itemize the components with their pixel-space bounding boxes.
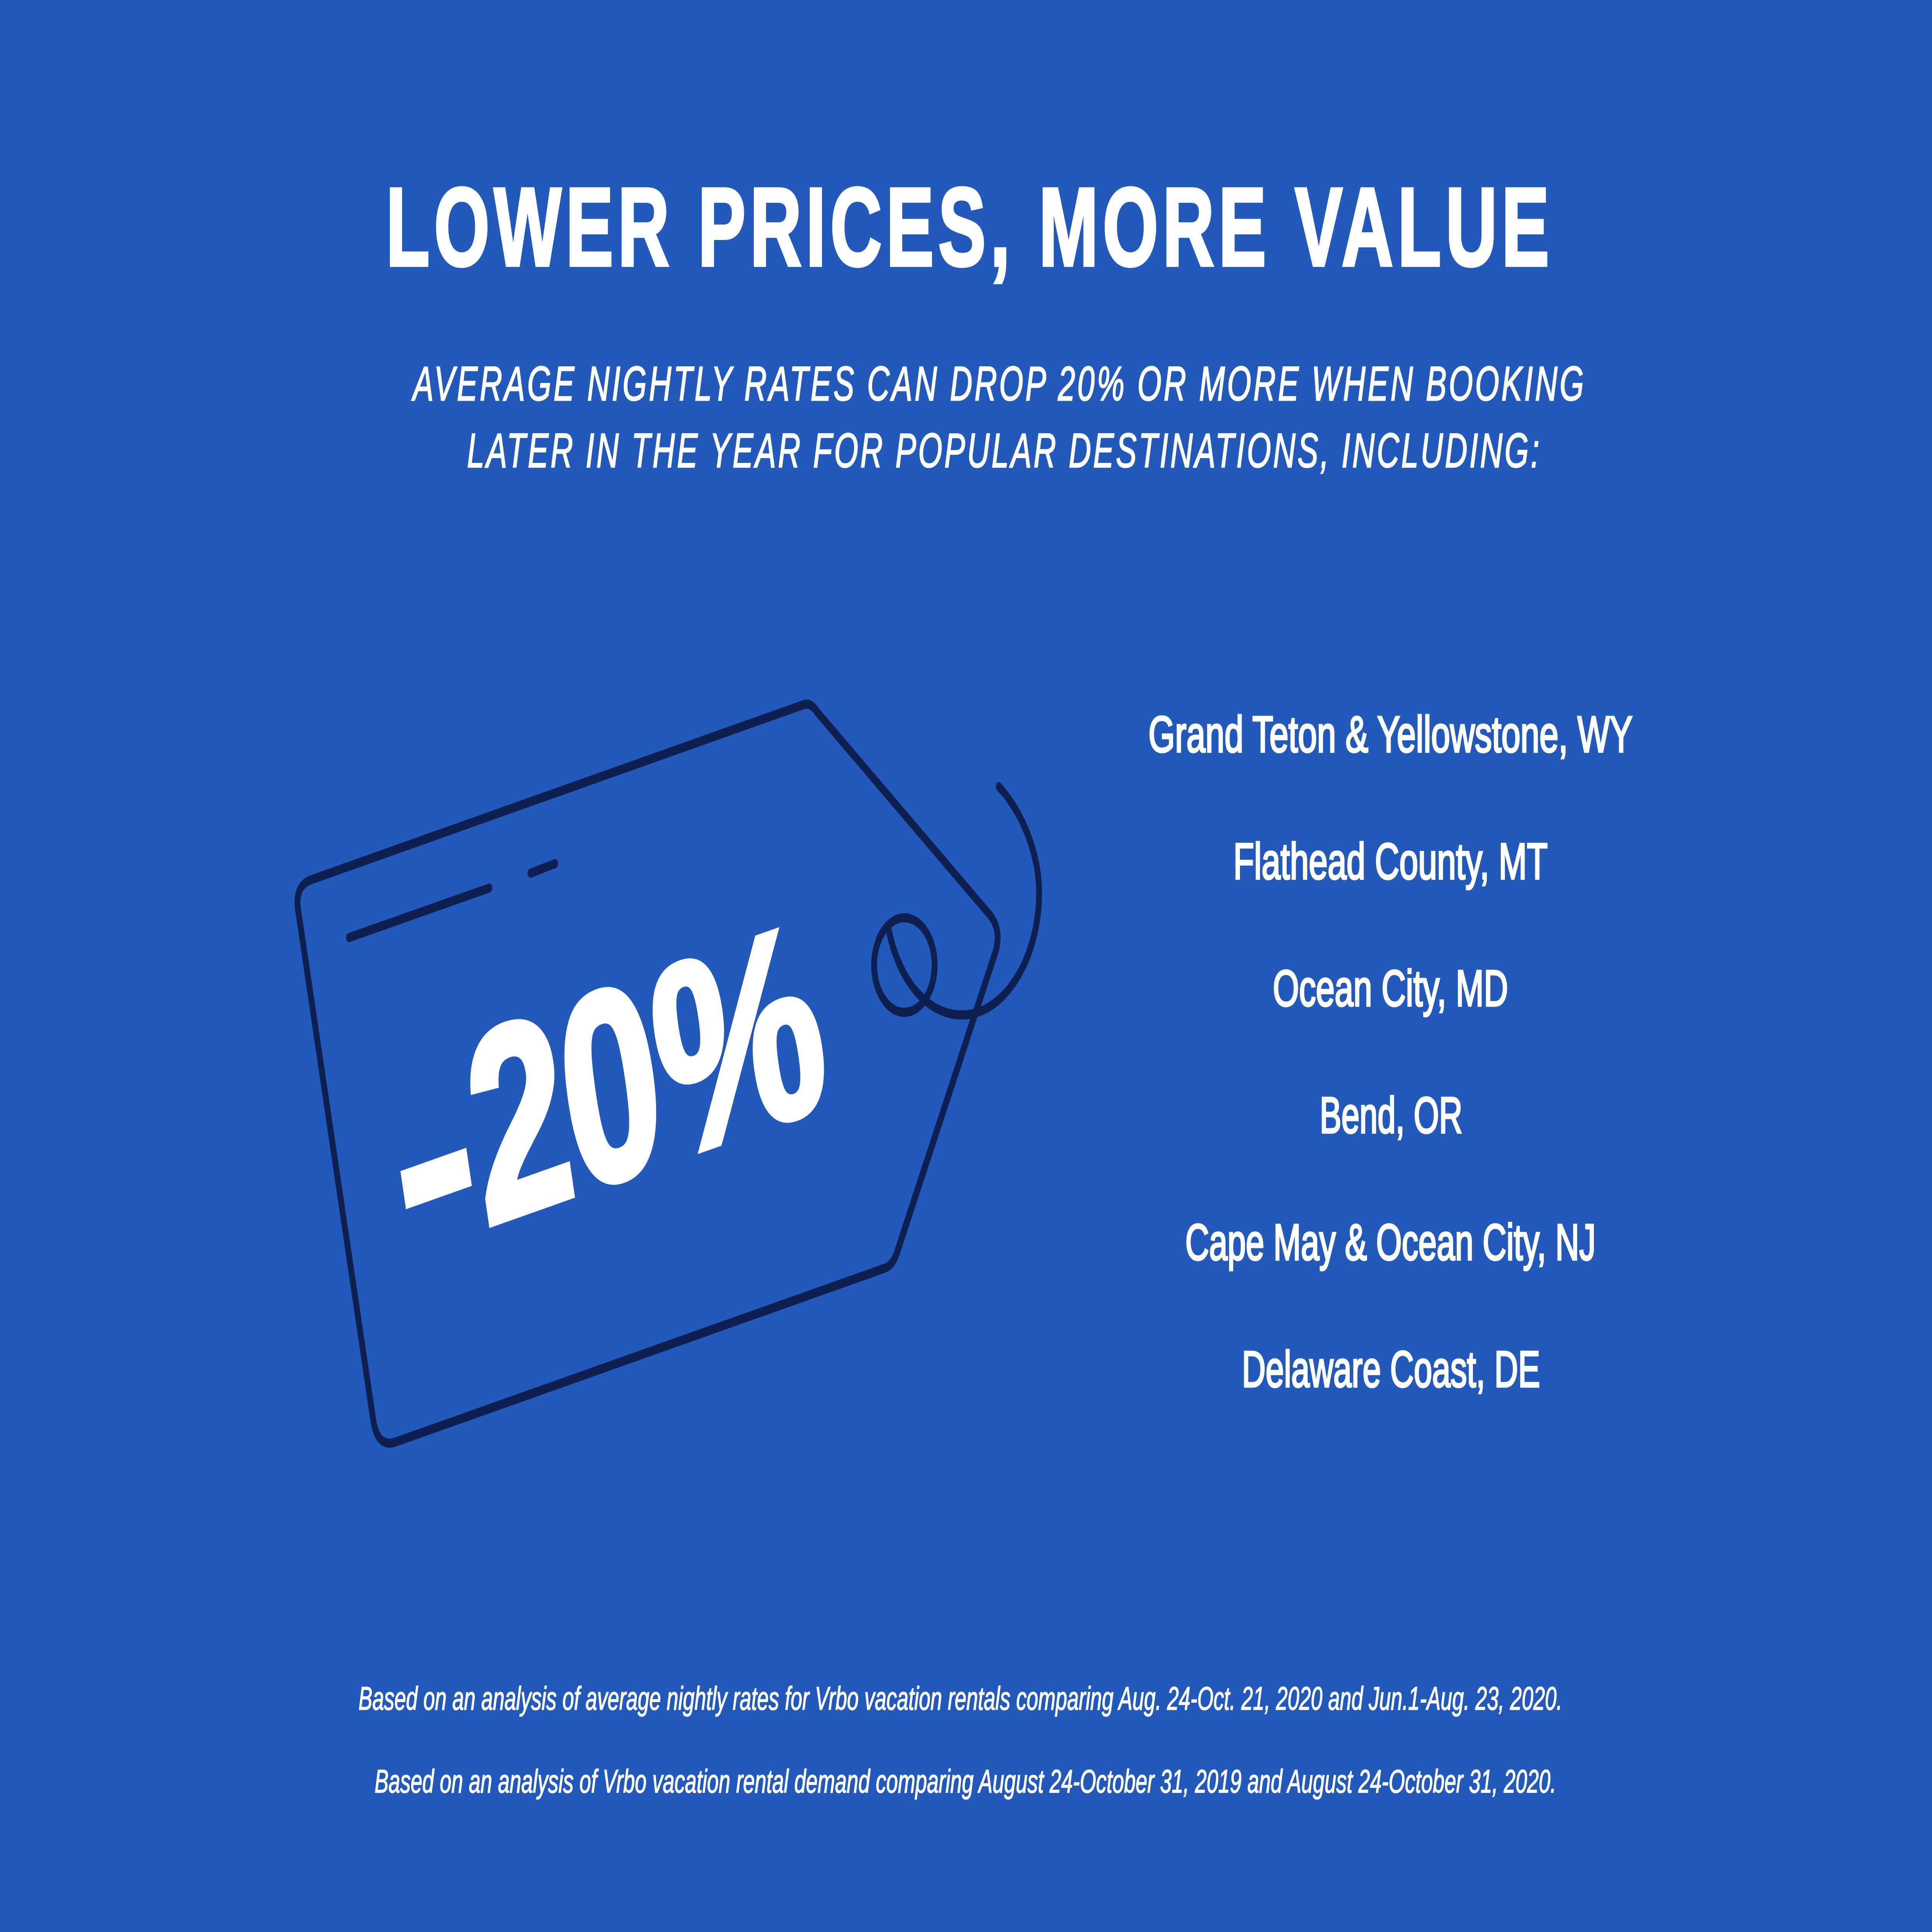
discount label: % [636,864,841,1216]
destination list [1148,706,1633,1398]
tag detail line short [531,864,555,873]
footnotes [359,1681,1562,1800]
discount label: 0 [542,921,679,1250]
discount label: - [372,994,493,1317]
destination list: Flathead County, MT [1233,833,1548,890]
destination list: Ocean City, MD [1273,960,1508,1017]
discount label [371,864,842,1317]
icon: price tag [298,704,1039,1443]
subtitle: AVERAGE NIGHTLY RATES CAN DROP 20% OR MORE WHEN BOOKING [411,357,1584,411]
destination list: Delaware Coast, DE [1242,1341,1540,1398]
subtitle [411,357,1584,478]
destination list: Bend, OR [1320,1087,1463,1144]
discount label: 2 [451,954,587,1282]
tag string [889,787,1039,1015]
footnotes: Based on an analysis of average nightly rates for Vrbo vacation rentals comparing Aug. 24-Oct. 21, 2020 and Jun.1-Aug. 23, 2020. [359,1681,1562,1717]
destination list: Cape May & Ocean City, NJ [1185,1214,1596,1271]
title: LOWER PRICES, MORE VALUE [386,165,1549,289]
tag outline [298,704,998,1443]
tag hole [874,918,935,1012]
tag detail line long [349,888,489,937]
footnotes: Based on an analysis of Vrbo vacation rental demand comparing August 24-October 31, 2019 and August 24-October 31, 2020. [374,1764,1556,1800]
destination list: Grand Teton & Yellowstone, WY [1148,706,1633,763]
subtitle: LATER IN THE YEAR FOR POPULAR DESTINATIONS, INCLUDING: [467,424,1539,478]
